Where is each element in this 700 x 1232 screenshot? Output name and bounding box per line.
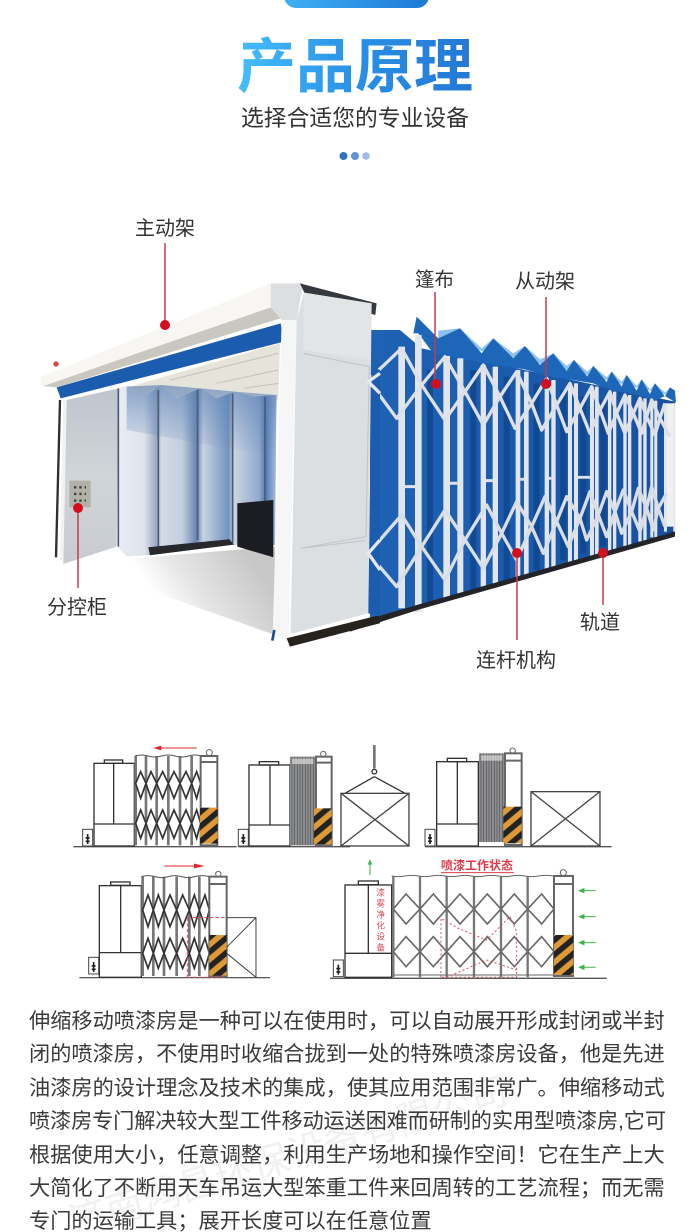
light valley strip xyxy=(438,328,675,397)
open booth end xyxy=(40,283,303,641)
end column xyxy=(201,750,217,845)
red arrow xyxy=(164,864,198,867)
description paragraph xyxy=(29,1010,666,1232)
roof fascia xyxy=(42,307,281,387)
operating diagrams xyxy=(73,745,612,979)
workpiece xyxy=(237,500,273,557)
diagram 4: booth moving right over workpiece xyxy=(79,864,270,978)
roof zigzag canopy xyxy=(413,317,676,403)
callout: 连杆机构: 连杆机构 xyxy=(476,649,556,672)
diagram 1: booth moving left xyxy=(73,746,237,847)
description paragraph: 根据使用大小，任意调整，利用生产场地和操作空间！它在生产上大 xyxy=(29,1144,665,1167)
callout: 主动架: 主动架 xyxy=(135,217,195,240)
description paragraph: 伸缩移动喷漆房是一种可以在使用时，可以自动展开形成封闭或半封 xyxy=(29,1010,665,1033)
description paragraph: 喷漆房专门解决较大型工件移动运送困难而研制的实用型喷漆房,它可 xyxy=(29,1110,666,1133)
product photo: spray booth xyxy=(40,217,676,672)
callout: 篷布 xyxy=(415,269,454,389)
callout: 分控柜 xyxy=(47,503,107,619)
vertical red label: 设 xyxy=(376,931,385,941)
green airflow arrows xyxy=(579,889,596,969)
fabric folds xyxy=(430,370,603,603)
ground shadow xyxy=(73,547,275,635)
diagram 3: collapsed with crate xyxy=(425,748,612,847)
diagram 2: collapsed with hoist xyxy=(238,751,350,847)
description paragraph: 大简化了不断用天车吊运大型笨重工件来回周转的工艺流程；而无需 xyxy=(29,1177,665,1200)
diagram 5: spray working state xyxy=(330,857,607,978)
callout: 主动架 xyxy=(135,217,195,330)
alarm lamp xyxy=(53,361,59,367)
blue valance xyxy=(57,323,284,398)
callout: 分控柜: 分控柜 xyxy=(47,596,107,619)
blue tarp side xyxy=(350,317,676,632)
door panel xyxy=(287,283,380,647)
track base xyxy=(350,532,675,632)
back curtains xyxy=(117,385,277,557)
callout: 轨道 xyxy=(580,548,620,634)
cabinet xyxy=(94,760,134,846)
vertical red label: 漆 xyxy=(376,886,385,897)
callout: 篷布: 篷布 xyxy=(415,269,454,291)
callout: 轨道: 轨道 xyxy=(580,611,620,634)
front white post xyxy=(273,320,297,640)
status heading: 喷漆工作状态 xyxy=(441,857,513,872)
roof top xyxy=(40,283,271,387)
vertical red label: 雾 xyxy=(376,898,385,908)
red arrow xyxy=(157,746,197,749)
lower scissor links xyxy=(368,487,667,587)
scissor links xyxy=(393,894,554,967)
roof end cap xyxy=(271,283,303,320)
ceiling xyxy=(130,343,280,400)
callout: 从动架: 从动架 xyxy=(515,270,575,293)
description paragraph: 油漆房的设计理念及技术的集成，使其应用范围非常广。伸缩移动式 xyxy=(29,1077,665,1100)
callout: 从动架 xyxy=(515,270,575,389)
white end panel xyxy=(667,403,674,527)
folding frame xyxy=(136,756,192,845)
vertical red label: 净 xyxy=(376,908,385,919)
vertical red label: 备 xyxy=(376,941,385,952)
left post xyxy=(56,400,60,557)
folding frame verticals xyxy=(398,335,675,612)
callout: 连杆机构 xyxy=(476,548,556,672)
header pill xyxy=(284,0,429,8)
upper scissor links xyxy=(368,348,670,437)
left side curtain xyxy=(63,388,118,564)
vertical red label xyxy=(376,886,385,952)
hoisted crate xyxy=(341,745,409,846)
control cabinet xyxy=(69,481,91,507)
title: 产品原理 xyxy=(237,34,473,100)
green up arrow xyxy=(368,859,372,875)
vertical red label: 化 xyxy=(376,919,385,930)
crossbars xyxy=(405,477,590,487)
pagination dots xyxy=(340,152,370,160)
description paragraph: 闭的喷漆房，不使用时收缩合拢到一处的特殊喷漆房设备，他是先进 xyxy=(29,1043,665,1066)
subtitle: 选择合适您的专业设备 xyxy=(241,105,469,131)
